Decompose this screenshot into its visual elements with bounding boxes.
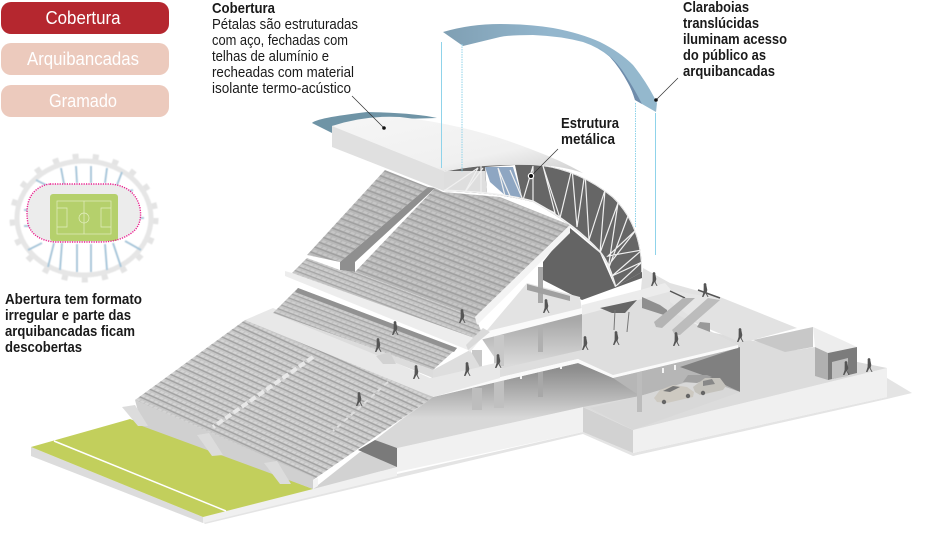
arco escuro inferior — [543, 228, 642, 300]
right block — [740, 327, 857, 392]
texto: Claraboias: arquibancadas — [683, 63, 775, 80]
arquibancada superior — [285, 170, 570, 352]
button: Cobertura — [1, 2, 169, 34]
texto: Cobertura: recheadas com material — [212, 64, 354, 81]
filter buttons — [1, 2, 169, 117]
texto: Claraboias — [683, 0, 787, 80]
texto: Cobertura — [212, 0, 358, 97]
arquibancada inferior — [122, 308, 500, 489]
lower columns — [472, 364, 676, 412]
escadas — [122, 405, 291, 484]
level 3 floor — [480, 267, 582, 340]
caption: abertura: arquibancadas ficam — [5, 323, 135, 340]
linhas de projecao — [442, 42, 656, 255]
carros — [654, 375, 726, 404]
stadium top view map — [13, 157, 155, 279]
caption: abertura: Abertura tem formato — [5, 291, 142, 308]
ground floor — [313, 330, 887, 489]
texto: Claraboias: translúcidas — [683, 15, 759, 32]
arquibancada do meio — [273, 288, 480, 378]
texto: Estrutura metalica — [561, 115, 620, 148]
caption: abertura: descobertas — [5, 339, 82, 356]
leader: claraboias — [654, 78, 678, 102]
button: Arquibancadas — [1, 43, 169, 75]
claraboia recuada — [312, 112, 437, 133]
button: Gramado — [1, 85, 169, 117]
texto: Cobertura: Cobertura — [212, 0, 276, 17]
button: Gramado: Gramado — [49, 91, 117, 111]
base slab — [203, 368, 887, 523]
stadium cutaway — [31, 170, 912, 524]
level 2 floor — [430, 296, 738, 397]
caption: abertura — [5, 291, 142, 356]
texto: Cobertura: com aço, fechadas com — [212, 32, 348, 49]
button: Cobertura: Cobertura — [46, 8, 121, 28]
texto: Estrutura metalica: metálica — [561, 131, 616, 148]
upper columns — [472, 322, 543, 368]
level 2 wall backdrop — [480, 312, 582, 370]
texto: Cobertura: isolante termo-acústico — [212, 80, 351, 97]
texto: Claraboias: do público as — [683, 47, 766, 64]
estrutura metalica arco — [444, 163, 642, 287]
caption: abertura: irregular e parte das — [5, 307, 131, 324]
gramado — [31, 419, 313, 523]
pessoas — [356, 272, 872, 406]
cobertura — [332, 117, 583, 191]
walkway and escalators — [582, 283, 720, 335]
texto: Cobertura: Pétalas são estruturadas — [212, 16, 358, 33]
texto: Estrutura metalica: Estrutura — [561, 115, 620, 132]
leader: cobertura — [352, 96, 386, 130]
texto: Cobertura: telhas de alumínio e — [212, 48, 329, 65]
claraboias — [443, 24, 657, 112]
texto: Claraboias: iluminam acesso — [683, 31, 787, 48]
terrace — [640, 268, 797, 342]
button: Arquibancadas: Arquibancadas — [27, 49, 139, 69]
ground shadow — [203, 378, 912, 524]
leader: estrutura metalica — [528, 149, 558, 179]
